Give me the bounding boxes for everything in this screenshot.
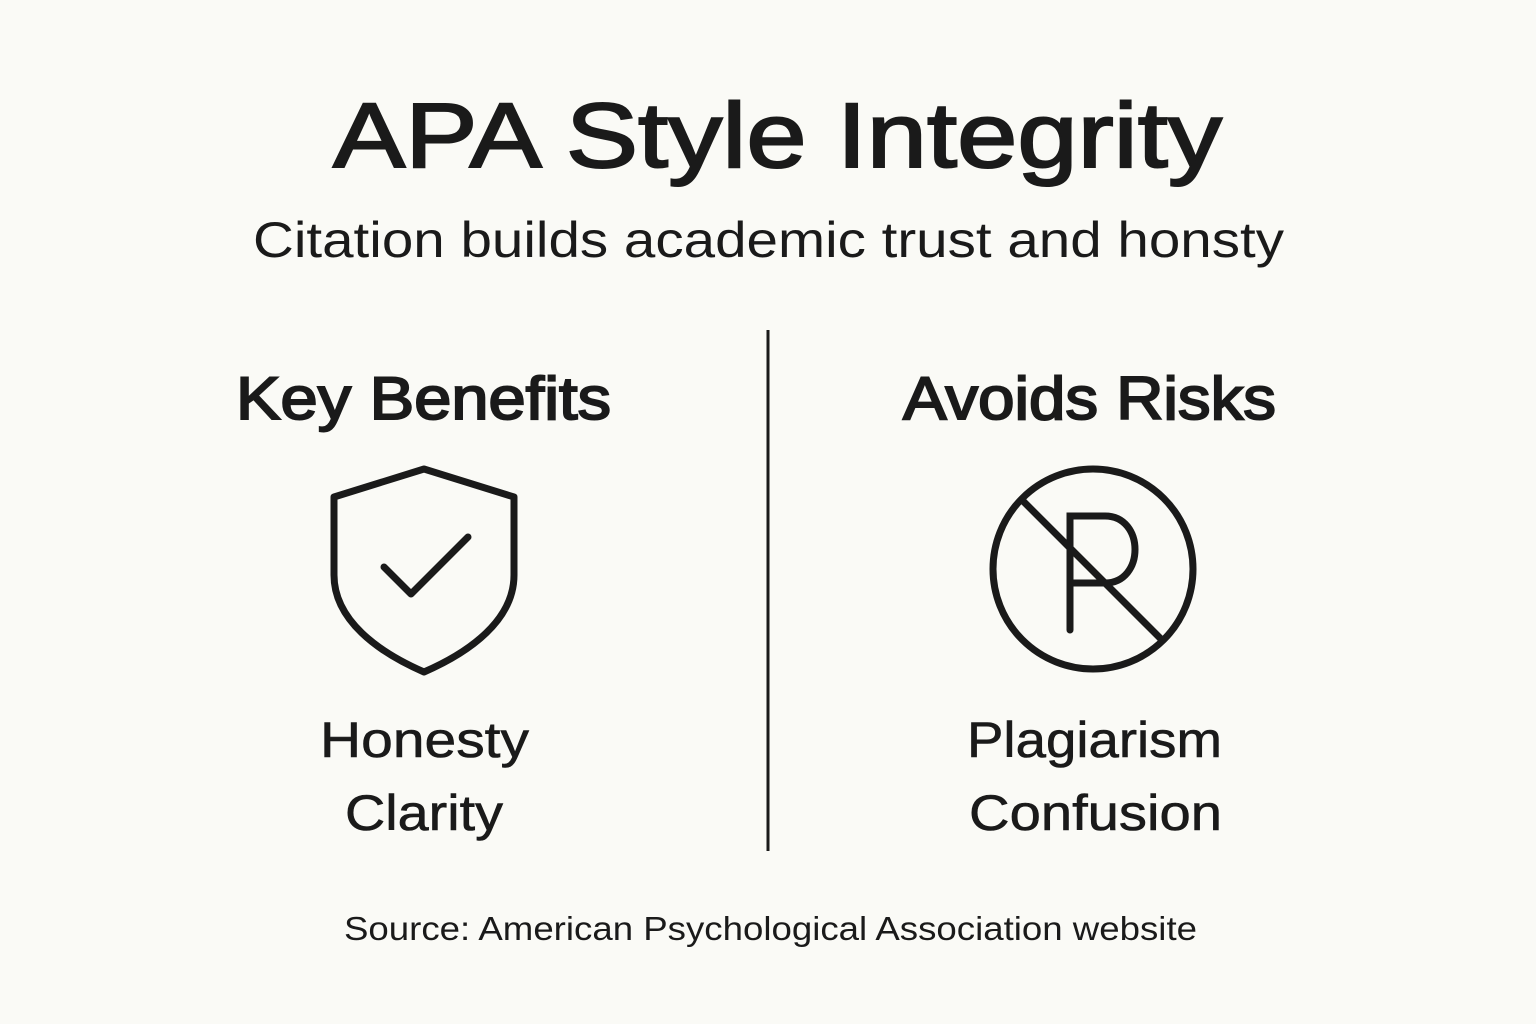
heading: key benefits: Key Benefits (236, 365, 611, 432)
text: benefits list (320, 712, 529, 841)
title: APA Style Integrity (333, 85, 1222, 187)
divider (766, 330, 770, 851)
icon: shield check (334, 469, 514, 672)
source footer: Source: American Psychological Association website (344, 910, 1197, 947)
text: benefits list: Honesty (320, 712, 529, 768)
icon: no plagiarism (993, 469, 1193, 669)
text: risks list (967, 712, 1222, 841)
text: benefits list: Clarity (345, 785, 503, 841)
subtitle: Citation builds academic trust and honsty (253, 212, 1284, 268)
text: risks list: Confusion (969, 785, 1222, 841)
heading: avoids risks: Avoids Risks (903, 365, 1276, 432)
text: risks list: Plagiarism (967, 712, 1222, 768)
panel: key benefits (236, 365, 611, 841)
panel: avoids risks (903, 365, 1276, 841)
